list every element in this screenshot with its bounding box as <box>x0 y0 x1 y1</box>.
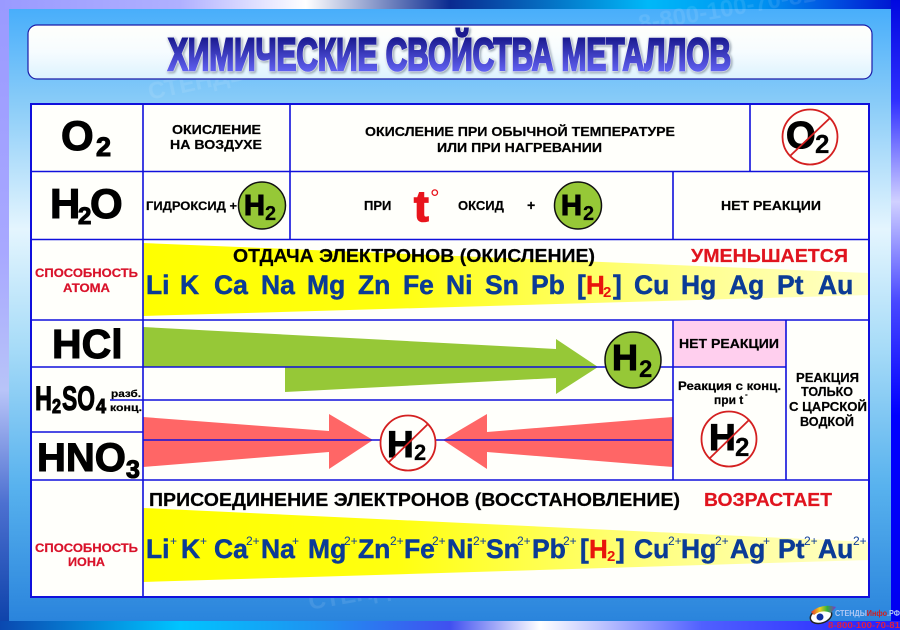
oxidation label <box>365 124 675 155</box>
ion series: Mg <box>308 534 346 564</box>
formula HNO3: HNO <box>37 436 126 480</box>
ion series: Sn <box>486 534 520 564</box>
metal series: ] <box>613 270 622 300</box>
atom label: СПОСОБНОСТЬ <box>35 266 138 280</box>
ion series: 2+ <box>246 534 260 548</box>
icon: eye <box>808 606 836 626</box>
aqua regia label <box>789 370 867 429</box>
icon: H2 green large: H <box>612 337 638 378</box>
aqua regia label: С ЦАРСКОЙ <box>789 399 867 414</box>
dilute and concentrated labels <box>110 388 142 414</box>
pink cell <box>673 320 786 367</box>
heading: electron gain: ПРИСОЕДИНЕНИЕ ЭЛЕКТРОНОВ (ВОССТАНОВЛЕНИЕ) <box>149 490 680 510</box>
formula O2: O <box>61 112 94 159</box>
metal series: Au <box>818 270 853 300</box>
ion series <box>146 534 867 565</box>
formula H2O <box>50 180 123 230</box>
ion series: Pt <box>778 534 805 564</box>
atom label: АТОМА <box>63 281 110 295</box>
icon: H2 green: 2 <box>583 203 594 225</box>
yellow wedge: ion <box>143 508 869 582</box>
formula H2O: H <box>50 180 80 227</box>
ion series: Li <box>146 534 170 564</box>
icon: no H2 right: H <box>709 417 736 458</box>
green arrow <box>143 327 598 394</box>
icon: H2 green: H <box>561 190 582 222</box>
ion series: K <box>181 534 200 564</box>
metal series: Na <box>261 270 295 300</box>
icon: H2 green: H <box>244 190 265 222</box>
metal series: Sn <box>485 270 519 300</box>
oxide label: ОКСИД <box>458 198 505 213</box>
ion series: Ca <box>214 534 248 564</box>
ion series: 2+ <box>804 534 818 548</box>
formula H2SO4: 2 <box>52 396 61 418</box>
icon: H2 green large <box>605 332 661 388</box>
ion series: 2+ <box>563 534 577 548</box>
icon: no H2 between arrows: 2 <box>414 440 426 465</box>
metal series: Fe <box>403 270 434 300</box>
heat label: ПРИ <box>364 198 391 213</box>
ion label <box>35 541 138 569</box>
metal series: K <box>180 270 199 300</box>
ion series: + <box>200 534 207 548</box>
dilute and concentrated labels: разб. <box>111 388 141 400</box>
ion series: ] <box>616 534 625 564</box>
watermarks: СТЕНДЫИНФО.РФ <box>306 551 530 616</box>
ion series: Fe <box>404 534 435 564</box>
ion series: [ <box>580 534 589 564</box>
ion series: Au <box>818 534 853 564</box>
ion series: Ag <box>730 534 765 564</box>
formula HNO3: 3 <box>126 456 140 484</box>
logo <box>808 606 900 630</box>
ion label: ИОНА <box>68 555 105 569</box>
aqua regia label: ТОЛЬКО <box>801 384 853 399</box>
formula H2SO4: 4 <box>96 396 107 418</box>
metal series: 2 <box>603 284 611 301</box>
red arrow left <box>443 414 673 469</box>
ion series: 2+ <box>473 534 487 548</box>
air oxidation label: НА ВОЗДУХЕ <box>170 137 262 152</box>
hydroxide label: ГИДРОКСИД + <box>146 199 237 213</box>
ion series: + <box>763 534 770 548</box>
phone: 8-800-100-70-81 <box>828 620 900 630</box>
ion label: СПОСОБНОСТЬ <box>35 541 138 555</box>
icon: no H2 right <box>702 412 756 466</box>
metal series <box>146 270 853 301</box>
ion series: 2+ <box>432 534 446 548</box>
metal series: Cu <box>634 270 669 300</box>
concentrated reaction label: при t <box>714 393 743 407</box>
concentrated reaction label: ° <box>745 393 748 401</box>
row O2 <box>61 110 838 164</box>
ion series: Na <box>261 534 295 564</box>
formula O2: 2 <box>96 132 111 162</box>
ion series: Pb <box>532 534 566 564</box>
ion series: 2+ <box>390 534 404 548</box>
formula H2O: O <box>90 180 123 227</box>
metal series: Hg <box>681 270 716 300</box>
ion series: H <box>589 534 608 564</box>
icon: no H2 right: 2 <box>735 432 749 462</box>
ion series: Hg <box>681 534 716 564</box>
icon: no O2: O <box>786 115 816 157</box>
oxidation label: ИЛИ ПРИ НАГРЕВАНИИ <box>437 140 602 155</box>
formula HCl: HCl <box>52 321 123 367</box>
row atom ability <box>35 246 853 301</box>
heading: electron donation: ОТДАЧА ЭЛЕКТРОНОВ (ОКИСЛЕНИЕ) <box>233 246 595 266</box>
ion series: Cu <box>634 534 669 564</box>
icon: no O2: 2 <box>815 129 829 159</box>
formula H2SO4: H <box>35 380 52 418</box>
ion series: 2+ <box>517 534 531 548</box>
metal series: [ <box>577 270 586 300</box>
ion series: 2+ <box>344 534 358 548</box>
table grid <box>31 104 869 597</box>
icon: H2 green: 2 <box>265 203 276 225</box>
table background <box>31 104 869 597</box>
heading: decreases: УМЕНЬШАЕТСЯ <box>691 246 848 266</box>
formula H2SO4: SO <box>62 380 95 418</box>
metal series: Pb <box>531 270 565 300</box>
ion series: Zn <box>358 534 390 564</box>
no reaction pink label: НЕТ РЕАКЦИИ <box>679 336 779 351</box>
metal series: Ag <box>729 270 764 300</box>
metal series: Mg <box>307 270 345 300</box>
plus: + <box>527 197 535 213</box>
metal series: Ni <box>446 270 472 300</box>
red arrow right <box>143 414 373 469</box>
t degree <box>414 182 440 231</box>
formula O2 <box>61 112 111 162</box>
ion series: 2+ <box>853 534 867 548</box>
oxidation label: ОКИСЛЕНИЕ ПРИ ОБЫЧНОЙ ТЕМПЕРАТУРЕ <box>365 124 675 139</box>
ion series: 2 <box>607 548 615 565</box>
watermarks <box>146 0 817 616</box>
metal series: Li <box>146 270 170 300</box>
formula H2O: 2 <box>78 203 91 230</box>
t degree: t <box>414 182 429 231</box>
row H2O <box>50 180 821 231</box>
icon: no H2 between arrows: H <box>387 424 414 465</box>
concentrated reaction label: Реакция с конц. <box>678 379 781 393</box>
ion series: + <box>292 534 299 548</box>
ion series: Ni <box>447 534 474 564</box>
title banner <box>28 25 872 80</box>
icon: H2 green <box>238 182 286 229</box>
t degree: ° <box>430 185 440 212</box>
watermarks: СТЕНДЫИНФО.РФ <box>146 33 368 106</box>
concentrated reaction label <box>678 379 781 407</box>
heading: increases: ВОЗРАСТАЕТ <box>704 490 832 510</box>
icon: no H2 between arrows <box>380 416 436 470</box>
metal series: Pt <box>777 270 804 300</box>
air oxidation label: ОКИСЛЕНИЕ <box>172 122 261 137</box>
no reaction label: НЕТ РЕАКЦИИ <box>721 198 821 213</box>
air oxidation label <box>170 122 262 152</box>
metal series: Ca <box>214 270 248 300</box>
icon: no O2 <box>782 110 838 164</box>
aqua regia label: ВОДКОЙ <box>800 414 854 429</box>
ion series: 2+ <box>715 534 729 548</box>
aqua regia label: РЕАКЦИЯ <box>796 370 859 385</box>
yellow wedge: atom <box>143 243 869 316</box>
row ion ability <box>35 490 867 569</box>
atom label <box>35 266 138 295</box>
metal series: Zn <box>358 270 390 300</box>
formula H2SO4 <box>35 380 107 418</box>
icon: H2 green large: 2 <box>639 356 652 383</box>
icon: H2 green <box>554 182 602 229</box>
metal series: H <box>586 270 605 300</box>
ion series: + <box>170 534 177 548</box>
dilute and concentrated labels: конц. <box>110 402 142 414</box>
ion series: 2+ <box>668 534 682 548</box>
